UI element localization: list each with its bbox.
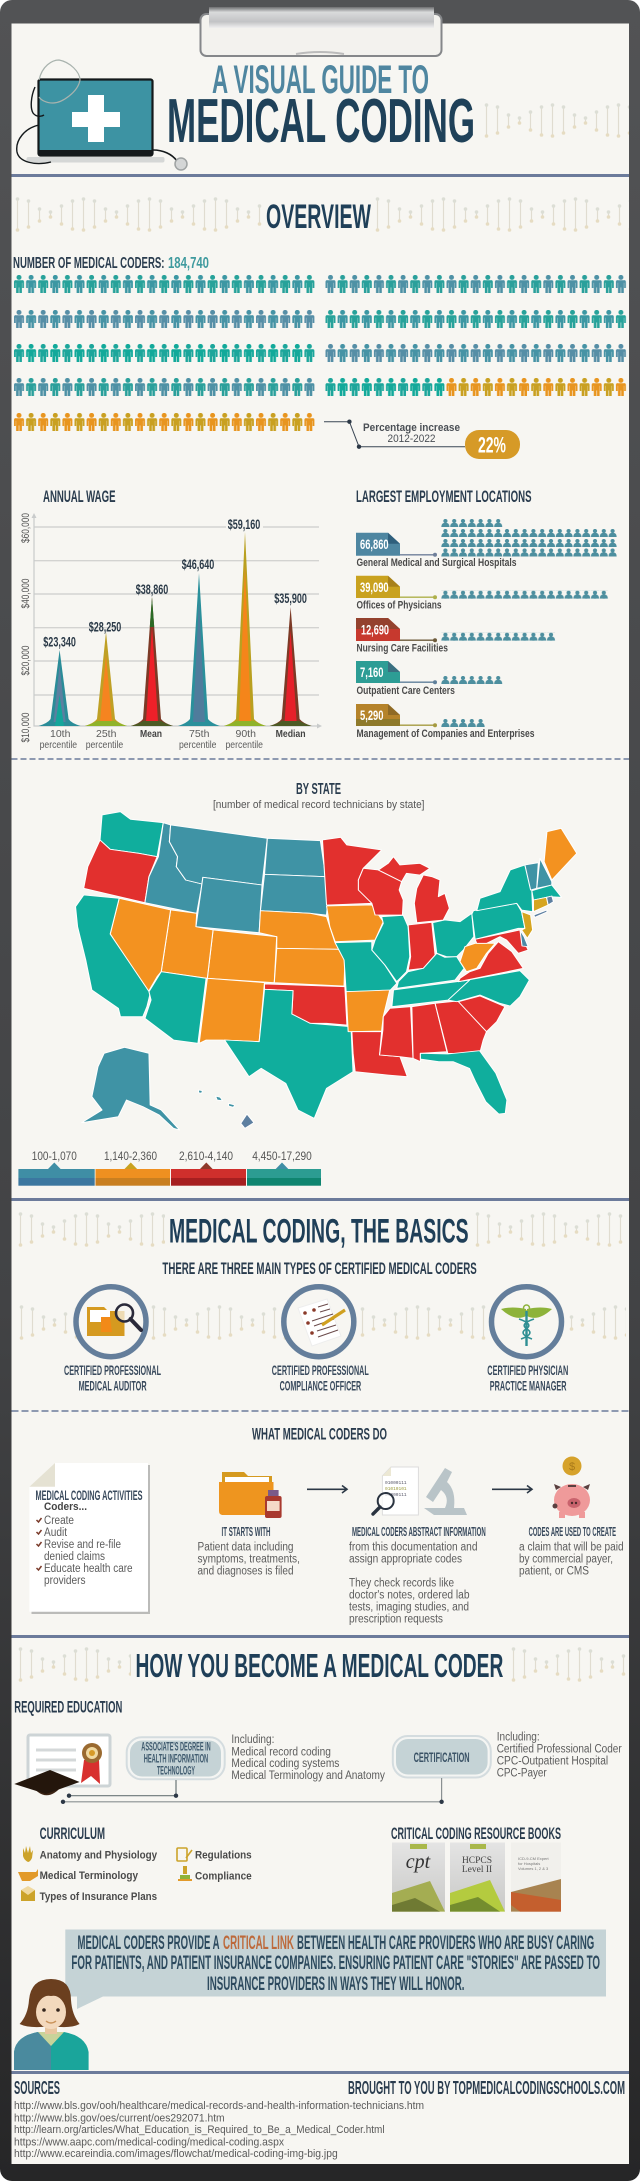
icon: document, magnifier and microscope: 01000111 <box>385 1492 407 1498</box>
employment: general medical and surgical hospitals: General Medical and Surgical Hospitals <box>356 557 516 569</box>
pill: associate's degree: ASSOCIATE'S DEGREE IN <box>141 1742 211 1754</box>
degree topics: Including: <box>231 1734 274 1746</box>
sources: http://www.ecareindia.com/images/flowchat/medical-coding-img-big.jpg <box>14 2148 338 2160</box>
chart: annual wage spikes: $10,000 <box>20 712 32 742</box>
pill: associate's degree: TECHNOLOGY <box>157 1766 195 1778</box>
map legend: 2,610-4,140 <box>179 1151 233 1163</box>
employment: offices of physicians <box>356 576 608 611</box>
icon: coin and piggy bank: $ <box>569 1461 575 1473</box>
decorative helix: how you become <box>15 1647 131 1683</box>
callout: percentage increase: Percentage increase <box>363 422 460 434</box>
step: codes are used to create <box>519 1456 624 1578</box>
wage values: $59,160 <box>228 517 260 532</box>
heading: by state <box>213 781 424 811</box>
clipboard clip <box>200 7 442 56</box>
sources: http://www.bls.gov/oes/current/oes292071.htm <box>14 2112 225 2124</box>
certification topics: CPC-Payer <box>497 1767 547 1779</box>
wage values: $35,900 <box>274 591 307 606</box>
curriculum list: Compliance <box>195 1870 252 1882</box>
book: icd: for Hospitals <box>518 1861 540 1866</box>
icon: document, magnifier and microscope <box>373 1467 467 1515</box>
panel: certified professional compliance officer: CERTIFIED PROFESSIONAL <box>272 1362 369 1378</box>
heading: by state: [number of medical record technicians by state] <box>213 799 424 811</box>
spike: mean <box>131 597 173 726</box>
book: hcpcs <box>450 1842 505 1912</box>
panel: certified professional medical auditor: MEDICAL AUDITOR <box>79 1378 147 1394</box>
panel: medical coding activities note: denied claims <box>44 1551 105 1563</box>
percentile labels: 75th <box>189 728 210 740</box>
step: abstract information: doctor's notes, ordered lab <box>349 1589 470 1601</box>
callout: percentage increase: 2012-2022 <box>388 433 436 445</box>
icon: woman medical coder <box>14 1979 89 2070</box>
panel: medical coding activities note: Revise and re-file <box>44 1539 121 1551</box>
step: codes are used to create: patient, or CMS <box>519 1566 589 1578</box>
icon: envelope <box>21 1886 35 1901</box>
book: cpt <box>392 1842 445 1912</box>
wage values: $28,250 <box>89 620 121 634</box>
chart: annual wage spikes <box>20 513 322 751</box>
book: cpt: cpt <box>406 1851 431 1873</box>
panel: certified physician practice manager: PRACTICE MANAGER <box>490 1378 566 1394</box>
book: icd <box>511 1842 561 1912</box>
pill: associate's degree <box>127 1737 225 1779</box>
curriculum list: Types of Insurance Plans <box>40 1891 157 1903</box>
percentile labels: 90th <box>236 728 256 740</box>
percentile labels: percentile <box>40 739 77 751</box>
certification topics: Certified Professional Coder <box>497 1743 622 1755</box>
arrow: step one to two <box>307 1486 347 1493</box>
employment: offices of physicians: 39,090 <box>360 579 389 595</box>
wage values: $46,640 <box>182 557 214 572</box>
callout: critical link: MEDICAL CODERS PROVIDE A <box>78 1933 220 1954</box>
title <box>167 58 475 156</box>
heading: overview: OVERVIEW <box>266 198 372 236</box>
percentile labels: percentile <box>226 739 263 751</box>
wage values: $38,860 <box>136 582 168 597</box>
panel: medical coding activities note: Coders... <box>44 1501 87 1513</box>
employment: offices of physicians: Offices of Physicians <box>356 599 442 611</box>
curriculum list: Medical Terminology <box>40 1870 139 1882</box>
step: codes are used to create: a claim that will be paid <box>519 1542 624 1554</box>
icon: hand <box>23 1846 33 1862</box>
spike: 10th percentile <box>39 650 81 726</box>
employment: management of companies: 5,290 <box>360 707 384 723</box>
decorative helix: title <box>481 103 629 139</box>
callout: critical link <box>65 1930 606 2009</box>
decorative helix: overview <box>12 197 264 233</box>
employment: general medical and surgical hospitals <box>356 519 617 569</box>
sources: http://learn.org/articles/What_Education_is_Required_to_Be_a_Medical_Coder.html <box>14 2124 385 2136</box>
icon: caduceus <box>492 1287 562 1357</box>
step: it starts with <box>198 1472 300 1578</box>
step: abstract information <box>349 1467 486 1625</box>
panel: medical coding activities note: MEDICAL CODING ACTIVITIES <box>36 1487 142 1503</box>
step: it starts with: Patient data including <box>198 1542 294 1554</box>
panel: medical coding activities note: providers <box>44 1575 86 1587</box>
panel: certified professional compliance officer <box>272 1287 369 1394</box>
curriculum list: CURRICULUM <box>40 1824 105 1843</box>
wage values: $23,340 <box>43 634 76 650</box>
heading: required education: REQUIRED EDUCATION <box>14 1697 122 1716</box>
arrow: step two to three <box>492 1486 532 1493</box>
spike: median <box>270 607 312 726</box>
map legend: 1,140-2,360 <box>104 1151 157 1163</box>
certification topics: Including: <box>497 1732 540 1744</box>
employment: outpatient care centers: Outpatient Care Centers <box>356 685 455 697</box>
curriculum list: Anatomy and Physiology <box>40 1849 158 1861</box>
pill: certification: CERTIFICATION <box>414 1750 470 1765</box>
spike: 90th percentile <box>224 532 266 726</box>
panel: medical coding activities note: Audit <box>44 1527 68 1539</box>
curriculum list <box>18 1824 252 1903</box>
certification topics <box>497 1732 622 1779</box>
sources <box>14 2077 424 2160</box>
callout: percentage increase: 22% <box>478 432 506 458</box>
degree topics <box>231 1734 385 1782</box>
pill: certification <box>393 1736 491 1778</box>
panel: medical coding activities note <box>29 1463 150 1614</box>
curriculum list: Regulations <box>195 1849 252 1861</box>
text: MEDICAL CODERS ABSTRACT INFORMATION <box>352 1524 486 1539</box>
employment: outpatient care centers <box>356 661 503 697</box>
icon: checklist and pencil <box>284 1287 354 1357</box>
decorative helix: basics <box>15 1212 165 1248</box>
employment: management of companies <box>356 704 534 740</box>
heading: what medical coders do: WHAT MEDICAL CODERS DO <box>252 1426 387 1444</box>
number of medical coders: NUMBER OF MEDICAL CODERS: <box>13 255 164 272</box>
callout: critical link: CRITICAL LINK <box>223 1933 294 1954</box>
icon: stamp <box>178 1866 192 1881</box>
percentile labels: 25th <box>96 728 117 740</box>
step: it starts with: and diagnoses is filed <box>198 1566 294 1578</box>
book: hcpcs: Level II <box>462 1865 492 1875</box>
employment: management of companies: Management of Companies and Enterprises <box>356 728 534 740</box>
pill: associate's degree: HEALTH INFORMATION <box>144 1754 208 1766</box>
icon: laptop with medical cross and stethoscope <box>17 60 187 170</box>
step: it starts with: IT STARTS WITH <box>222 1524 270 1539</box>
step: abstract information: prescription requests <box>349 1613 443 1625</box>
spike: 75th percentile <box>178 573 220 726</box>
wage values <box>43 517 307 650</box>
book: icd: Volumes 1, 2 & 3 <box>518 1866 549 1871</box>
connectors: education path <box>61 1778 444 1804</box>
chart: annual wage spikes: $40,000 <box>20 578 32 608</box>
step: it starts with: symptoms, treatments, <box>198 1554 300 1566</box>
employment: general medical and surgical hospitals: 66,860 <box>360 536 389 552</box>
panel: certified professional medical auditor <box>64 1287 161 1394</box>
panel: certified physician practice manager: CERTIFIED PHYSICIAN <box>487 1362 568 1378</box>
icon: document, magnifier and microscope: 01010101 <box>385 1486 407 1492</box>
chart: annual wage spikes: $60,000 <box>20 513 32 543</box>
icon: book <box>18 1869 38 1881</box>
employment: nursing care facilities: Nursing Care Facilities <box>356 643 448 655</box>
employment: outpatient care centers: 7,160 <box>360 664 384 680</box>
sources: SOURCES <box>14 2077 60 2098</box>
people pictogram chart <box>13 275 627 431</box>
degree topics: Medical Terminology and Anatomy <box>231 1770 385 1782</box>
step: abstract information: They check records like <box>349 1577 454 1589</box>
employment: nursing care facilities: 12,690 <box>361 622 389 638</box>
panel: certified professional medical auditor: CERTIFIED PROFESSIONAL <box>64 1362 161 1378</box>
callout: percentage increase <box>324 420 520 459</box>
percentile labels: Median <box>276 728 306 740</box>
icon: document, magnifier and microscope: 01000111 <box>385 1480 407 1486</box>
sources: https://www.aapc.com/medical-coding/medical-coding.aspx <box>14 2136 284 2148</box>
book: hcpcs: HCPCS <box>462 1856 492 1866</box>
percentile labels <box>40 728 306 751</box>
certification topics: CPC-Outpatient Hospital <box>497 1756 608 1768</box>
employment: nursing care facilities <box>356 618 555 655</box>
map legend: 4,450-17,290 <box>252 1151 312 1163</box>
step: abstract information: assign appropriate codes <box>349 1554 462 1566</box>
percentile labels: 10th <box>50 728 71 740</box>
number of medical coders: 184,740 <box>168 255 209 272</box>
map legend <box>18 1151 321 1186</box>
icon: folder and magnifier <box>76 1287 146 1357</box>
step: codes are used to create: by commercial payer, <box>519 1554 613 1566</box>
heading: annual wage: ANNUAL WAGE <box>43 487 116 506</box>
panel: certified professional compliance officer: COMPLIANCE OFFICER <box>280 1378 361 1394</box>
icon: folder and bottle <box>219 1472 282 1518</box>
title: A VISUAL GUIDE TO <box>212 58 429 102</box>
map: medical record technicians by US state <box>76 812 577 1130</box>
percentile labels: Mean <box>140 728 162 740</box>
step: abstract information: tests, imaging studies, and <box>349 1601 469 1613</box>
icon: diploma and graduation cap <box>14 1735 110 1795</box>
step: abstract information: from this documentation and <box>349 1542 478 1554</box>
degree topics: Medical coding systems <box>231 1758 340 1770</box>
panel: medical coding activities note: Create <box>44 1515 74 1527</box>
heading: by state: BY STATE <box>296 781 341 798</box>
chart: annual wage spikes: $20,000 <box>20 646 32 676</box>
critical coding resource books <box>391 1824 561 1912</box>
sources: http://www.bls.gov/ooh/healthcare/medical-records-and-health-information-technicians.htm <box>14 2100 424 2112</box>
book: icd: ICD-9-CM Expert <box>518 1856 550 1861</box>
icon: notes <box>177 1848 192 1861</box>
panel: certified physician practice manager <box>487 1287 568 1394</box>
percentile labels: percentile <box>86 739 123 751</box>
panel: medical coding activities note: Educate health care <box>44 1563 133 1575</box>
map legend: 100-1,070 <box>32 1151 77 1163</box>
percentile labels: percentile <box>179 739 217 751</box>
degree topics: Medical record coding <box>231 1746 331 1758</box>
spike: 25th percentile <box>85 632 127 726</box>
